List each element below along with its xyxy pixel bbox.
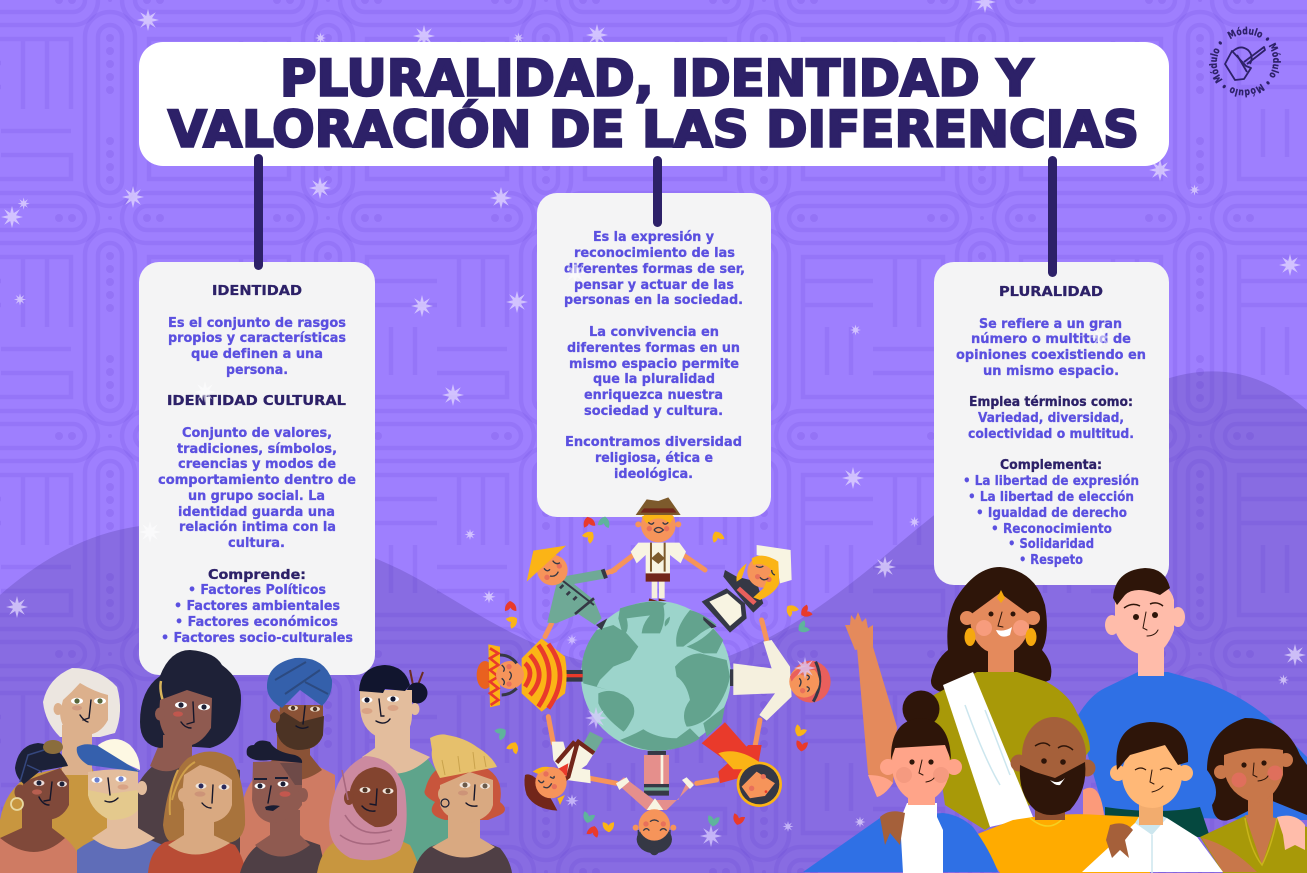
person: man with quiff xyxy=(240,741,326,873)
heading: identidad: IDENTIDAD xyxy=(212,284,302,299)
hearts xyxy=(494,515,813,838)
text block: convivencia: sociedad y cultura. xyxy=(584,404,723,419)
person: man in blue sweater xyxy=(1077,568,1307,837)
text block: identidad definition: Es el conjunto de rasgos xyxy=(168,316,346,331)
person: woman with head wrap and hoops xyxy=(0,740,84,873)
character: child in pink xyxy=(616,751,694,855)
text block: identidad cultural definition: un grupo social. La xyxy=(188,489,325,504)
faint stars over panels xyxy=(139,262,1112,543)
text block: expresión: pensar y actuar de las xyxy=(574,278,734,293)
stars around the globe xyxy=(565,634,816,847)
heading: complementa: Complementa: xyxy=(1000,458,1102,473)
text block: identidad cultural definition: identidad guarda una xyxy=(178,505,335,520)
character: girl with apron xyxy=(702,545,792,633)
text block: expresión: personas en la sociedad. xyxy=(564,293,743,308)
title text: VALORACIÓN DE LAS DIFERENCIAS xyxy=(168,100,1139,158)
character: child with yellow conical hat xyxy=(527,546,607,630)
text block: identidad definition xyxy=(168,316,346,378)
text block: diversidad: ideológica. xyxy=(614,467,693,482)
character: girl in red and yellow xyxy=(702,722,782,807)
text block: términos: colectividad o multitud. xyxy=(968,427,1134,442)
icon: book and pencil xyxy=(1225,47,1265,80)
heading: pluralidad: PLURALIDAD xyxy=(999,285,1103,300)
text block: convivencia: que la pluralidad xyxy=(593,372,715,387)
text block: pluralidad definition: Se refiere a un gran xyxy=(979,317,1122,332)
person: woman with yellow beanie xyxy=(413,734,512,873)
person: smiling boy xyxy=(1082,722,1223,873)
arms ring xyxy=(545,555,767,783)
list: factores: • Factores socio-culturales xyxy=(161,631,353,646)
text block: términos xyxy=(968,411,1134,442)
illustration: group of diverse people, left xyxy=(0,650,512,873)
list: complementa xyxy=(963,474,1139,568)
text block: identidad cultural definition: creencias y modos de xyxy=(178,457,336,472)
text block: identidad cultural definition: tradiciones, símbolos, xyxy=(177,442,337,457)
person: man with blue turban xyxy=(240,658,335,873)
title text xyxy=(168,50,1139,158)
text block: identidad cultural definition: relación intima con la xyxy=(179,520,336,535)
text block: expresión: diferentes formas de ser, xyxy=(564,262,745,277)
text block: convivencia: mismo espacio permite xyxy=(569,357,739,372)
text block: expresión: reconocimiento de las xyxy=(574,246,735,261)
character: child with pink hood xyxy=(730,640,831,721)
text block: pluralidad definition: un mismo espacio. xyxy=(983,364,1119,379)
text block: convivencia: diferentes formas en un xyxy=(567,341,740,356)
illustration: group of diverse people, right xyxy=(803,567,1307,873)
icon: globe xyxy=(581,601,731,751)
person: white-haired woman xyxy=(0,668,120,873)
list: complementa: • La libertad de expresión xyxy=(963,474,1139,489)
person: woman with hair bun xyxy=(359,665,450,873)
text block: términos: Variedad, diversidad, xyxy=(978,411,1124,426)
text block: identidad cultural definition xyxy=(158,426,356,551)
character: child in lederhosen xyxy=(524,732,603,811)
list: complementa: • Respeto xyxy=(1019,553,1083,568)
list: factores: • Factores ambientales xyxy=(174,599,340,614)
panel: title xyxy=(139,42,1169,166)
text block: identidad cultural definition: cultura. xyxy=(228,536,285,551)
character: child in sombrero and poncho xyxy=(477,638,583,712)
heading: comprende: Comprende: xyxy=(208,568,306,583)
person: woman with curly black hair xyxy=(135,650,241,873)
heading: identidad cultural: IDENTIDAD CULTURAL xyxy=(167,394,346,409)
person: woman with wavy blond hair xyxy=(148,752,245,873)
panel: definition of diversity xyxy=(537,193,771,517)
list: factores xyxy=(161,583,353,646)
text block: pluralidad definition xyxy=(956,317,1146,379)
person: man with blue cap xyxy=(77,739,163,873)
text block: pluralidad definition: número o multitud de xyxy=(971,332,1131,347)
panel: identidad xyxy=(139,262,375,675)
person: bald bearded man xyxy=(975,717,1150,873)
person: woman with pink hijab xyxy=(317,756,419,873)
text block: pluralidad definition: opiniones coexistiendo en xyxy=(956,348,1146,363)
logo: Módulo badge: Módulo • Módulo • Módulo • Módulo • xyxy=(1208,26,1281,98)
text block: convivencia: enriquezca nuestra xyxy=(584,388,723,403)
list: complementa: • Reconocimiento xyxy=(991,522,1112,537)
text block: identidad cultural definition: comportamiento dentro de xyxy=(158,473,356,488)
text block: convivencia: La convivencia en xyxy=(589,325,719,340)
list: complementa: • Igualdad de derecho xyxy=(976,506,1127,521)
title text: PLURALIDAD, IDENTIDAD Y xyxy=(280,50,1034,108)
connector: identidad xyxy=(254,154,263,270)
person: woman at far right xyxy=(1200,718,1307,873)
person: woman with hair bun xyxy=(803,690,998,873)
list: factores: • Factores Políticos xyxy=(188,583,326,598)
text block: expresión xyxy=(564,230,745,308)
text block: diversidad: Encontramos diversidad xyxy=(565,435,742,450)
person: woman in sari xyxy=(845,567,1090,830)
list: complementa: • La libertad de elección xyxy=(968,490,1134,505)
text block: expresión: Es la expresión y xyxy=(593,230,715,245)
heading: emplea términos: Emplea términos como: xyxy=(969,395,1133,410)
connector: centre panel xyxy=(653,156,662,227)
connector: pluralidad xyxy=(1048,156,1057,277)
text block: diversidad: religiosa, ética e xyxy=(595,451,713,466)
character: boy with hat xyxy=(631,497,686,601)
list: factores: • Factores económicos xyxy=(175,615,338,630)
text block: convivencia xyxy=(567,325,740,419)
text block: identidad definition: que definen a una xyxy=(191,347,323,362)
text block: diversidad xyxy=(565,435,742,482)
text block: identidad definition: persona. xyxy=(226,363,288,378)
panel: pluralidad xyxy=(934,262,1169,585)
list: complementa: • Solidaridad xyxy=(1008,537,1094,552)
text block: identidad definition: propios y características xyxy=(168,331,346,346)
illustration: children holding hands around the globe xyxy=(477,497,831,855)
text block: identidad cultural definition: Conjunto de valores, xyxy=(182,426,332,441)
